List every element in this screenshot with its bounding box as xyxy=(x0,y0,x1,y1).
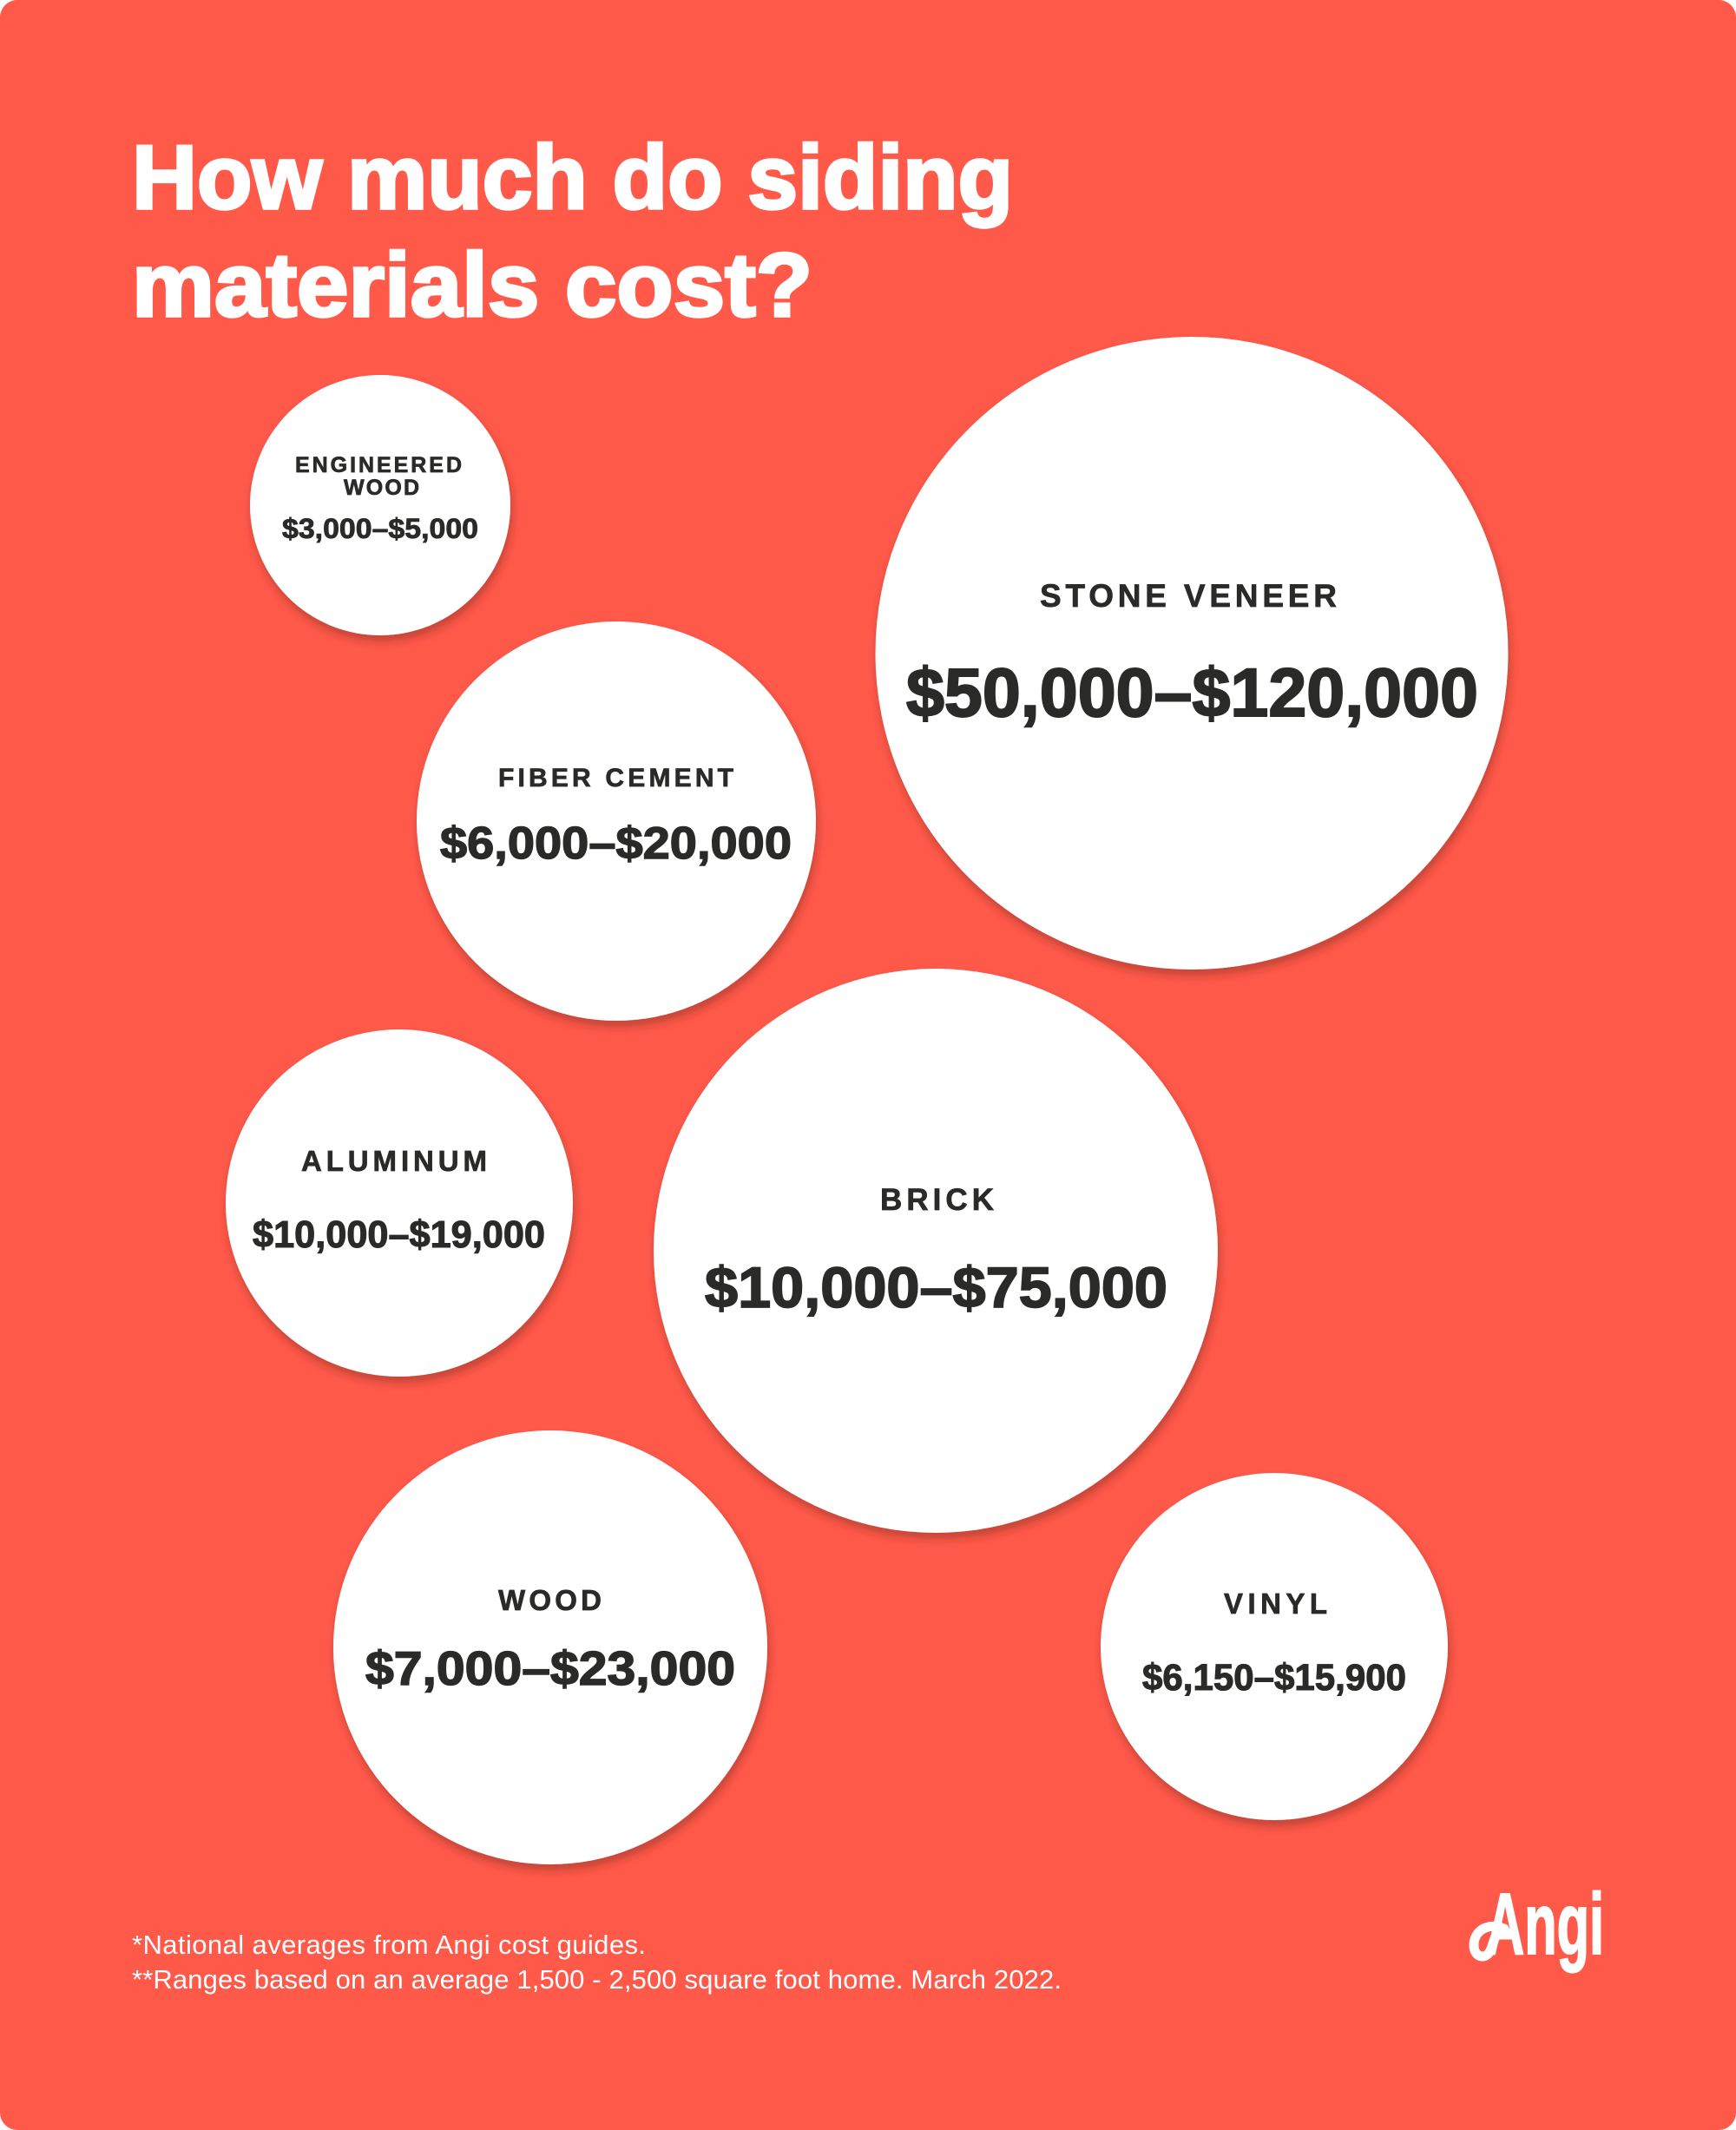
label: engineered wood: ENGINEERED xyxy=(295,453,462,477)
title: materials cost? xyxy=(132,235,812,336)
label: fiber cement: FIBER CEMENT xyxy=(498,764,733,792)
footnote: *National averages from Angi cost guides. xyxy=(132,1929,646,1960)
price: fiber cement: $6,000–$20,000 xyxy=(440,818,792,869)
price: aluminum: $10,000–$19,000 xyxy=(253,1213,545,1256)
title: How much do siding xyxy=(132,128,1013,228)
label: aluminum: ALUMINUM xyxy=(301,1145,487,1177)
label: brick: BRICK xyxy=(880,1183,994,1217)
bubble: brick xyxy=(654,969,1218,1533)
label: stone veneer: STONE VENEER xyxy=(1040,578,1337,614)
label: vinyl: VINYL xyxy=(1224,1588,1327,1620)
price: vinyl: $6,150–$15,900 xyxy=(1142,1657,1406,1699)
footnote: **Ranges based on an average 1,500 - 2,500 square foot home. March 2022. xyxy=(132,1964,1062,1995)
price: wood: $7,000–$23,000 xyxy=(365,1641,735,1695)
price: stone veneer: $50,000–$120,000 xyxy=(906,654,1478,731)
label: engineered wood xyxy=(295,453,462,500)
label: wood: WOOD xyxy=(498,1584,602,1616)
bubble: stone veneer xyxy=(875,337,1509,970)
price: engineered wood: $3,000–$5,000 xyxy=(282,513,478,544)
bubble: engineered wood xyxy=(250,375,510,635)
logo: Angi xyxy=(1474,1876,1604,1973)
label: engineered wood: WOOD xyxy=(344,476,419,500)
bubble: wood xyxy=(333,1430,767,1864)
title xyxy=(132,128,1013,336)
bubble: vinyl xyxy=(1101,1473,1448,1820)
bubble: fiber cement xyxy=(417,621,816,1021)
logo: Angi: Angi xyxy=(1486,1876,1604,1973)
footnote xyxy=(132,1929,1062,1995)
bubble: aluminum xyxy=(226,1029,573,1377)
price: brick: $10,000–$75,000 xyxy=(705,1255,1167,1319)
